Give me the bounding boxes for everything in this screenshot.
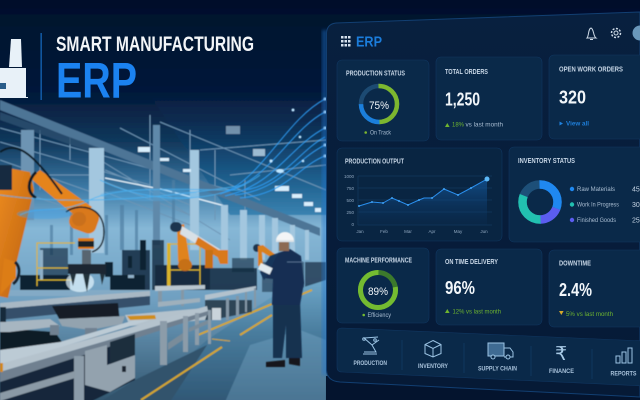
- machine stations: [52, 303, 120, 324]
- module: reports: REPORTS: [610, 372, 636, 378]
- card: total orders: [436, 57, 542, 140]
- card: inventory status: [509, 147, 640, 242]
- change: vs last month: [466, 122, 503, 128]
- cabinet: [85, 345, 135, 392]
- title: [56, 33, 254, 108]
- icon: bell: [587, 28, 596, 40]
- line chart: Jun: [480, 229, 488, 234]
- module: supply chain: [478, 343, 517, 372]
- donut: [361, 86, 397, 122]
- value: 1,250: [445, 90, 480, 110]
- line chart: Apr: [428, 229, 436, 234]
- panel glow: [322, 30, 327, 375]
- value: 75%: [369, 100, 389, 112]
- floor: [135, 280, 326, 400]
- line chart: Mar: [404, 229, 412, 234]
- module: finance: ₹: [555, 344, 567, 365]
- change: 18%: [452, 122, 465, 128]
- change: [445, 122, 503, 128]
- mid table: [125, 308, 208, 326]
- data waves: [220, 97, 327, 198]
- legend: Finished Goods: [577, 218, 616, 224]
- floor shadow under dashboard: [326, 376, 640, 400]
- title: SMART MANUFACTURING: [56, 33, 254, 56]
- line chart: May: [454, 229, 463, 234]
- main conveyor: [0, 306, 208, 372]
- line chart: [344, 174, 492, 234]
- heading: OPEN WORK ORDERS: [559, 66, 623, 74]
- value: 96%: [445, 278, 475, 298]
- link: View all: [566, 120, 589, 128]
- module: finance: [549, 344, 574, 375]
- card: downtime: [549, 250, 640, 327]
- robot arm 3: [253, 244, 276, 266]
- title: ERP: [56, 52, 137, 108]
- donut: [358, 270, 398, 310]
- card: production status: [337, 60, 429, 141]
- light glow: [66, 272, 94, 292]
- change: 12% vs last month: [452, 310, 501, 316]
- line chart: 750: [346, 186, 354, 191]
- module: production: [354, 337, 387, 367]
- heading: PRODUCTION OUTPUT: [345, 158, 405, 166]
- ceiling beam: [0, 100, 320, 236]
- avatar: [632, 26, 640, 40]
- card: open work orders: [549, 55, 640, 139]
- donut: [517, 179, 563, 225]
- divider: [40, 33, 42, 100]
- floor under conveyor dark: [0, 335, 135, 400]
- legend: Work In Progress: [577, 202, 619, 208]
- card: on time delivery: [436, 249, 542, 325]
- line chart: 1000: [344, 174, 354, 179]
- module: inventory: INVENTORY: [418, 364, 448, 370]
- module: inventory: [418, 340, 448, 370]
- dashboard panel: [326, 12, 640, 397]
- grid icon: [341, 36, 350, 46]
- conveyor legs: [74, 310, 211, 400]
- belt: [0, 320, 150, 366]
- card: machine performance: [337, 248, 429, 323]
- heading: MACHINE PERFORMANCE: [345, 258, 412, 264]
- line chart: Jan: [356, 229, 364, 234]
- logo: factory icon: [0, 39, 28, 98]
- heading: PRODUCTION STATUS: [346, 70, 405, 78]
- ERP label: ERP: [356, 34, 382, 50]
- module: supply chain: SUPPLY CHAIN: [478, 366, 517, 372]
- rear conveyor: [155, 285, 256, 320]
- module: production: PRODUCTION: [354, 361, 387, 367]
- yellow floor lines: [141, 290, 312, 400]
- heading: TOTAL ORDERS: [445, 69, 488, 76]
- worker: [258, 232, 304, 367]
- legend: [570, 186, 640, 224]
- line chart: 500: [346, 198, 354, 203]
- module: finance: FINANCE: [549, 369, 574, 375]
- ceiling lights: [138, 126, 321, 212]
- status: On Track: [370, 130, 392, 136]
- heading: DOWNTIME: [559, 260, 591, 268]
- back row table: [0, 291, 150, 309]
- module bar: [337, 328, 640, 386]
- status: Efficiency: [368, 313, 391, 319]
- value: 2.4%: [559, 280, 592, 300]
- icon: gear: [612, 28, 620, 38]
- module: reports: [610, 348, 636, 378]
- line chart: 0: [351, 222, 354, 227]
- value: 89%: [368, 286, 388, 298]
- value: 320: [559, 88, 586, 108]
- robot arm 2: [170, 222, 228, 271]
- columns: [21, 125, 309, 260]
- yellow fence: [37, 243, 200, 286]
- light streaks: [0, 175, 260, 215]
- line chart: Feb: [380, 229, 388, 234]
- line chart: 250: [346, 210, 354, 215]
- change: 5% vs last month: [566, 312, 613, 318]
- heading: INVENTORY STATUS: [518, 158, 575, 165]
- back machinery: [40, 240, 326, 292]
- card: production output: [337, 148, 502, 241]
- heading: ON TIME DELIVERY: [445, 259, 498, 266]
- robot arm 1: [0, 148, 106, 298]
- legend: Raw Materials: [577, 187, 615, 193]
- ERP header: [341, 34, 382, 50]
